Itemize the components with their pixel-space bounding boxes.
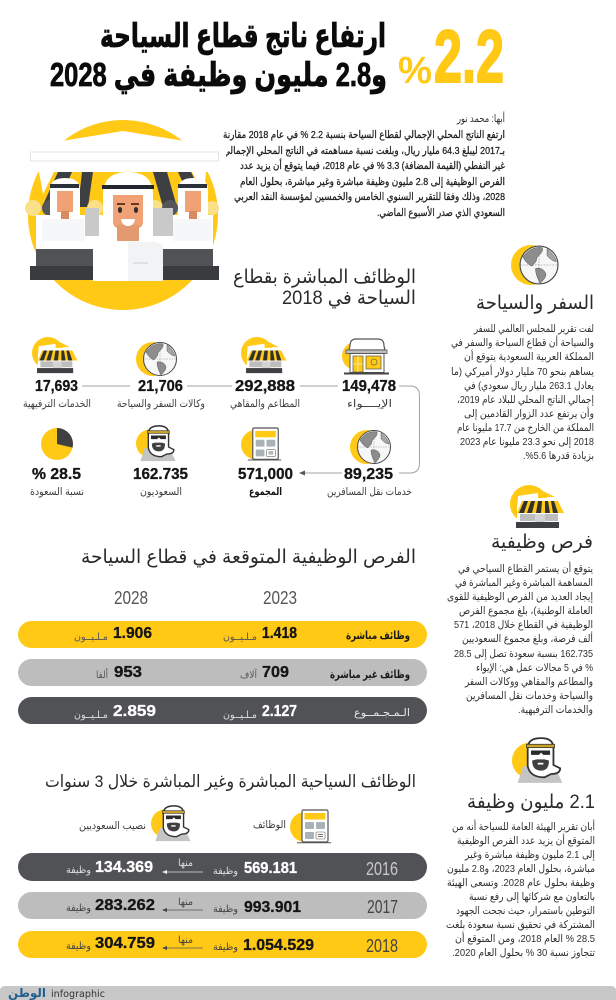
row: 2016: 2016 — [366, 859, 398, 879]
panel: 2.1 million jobs: إلى 2.1 مليون وظيفة مباشرة وغير — [464, 849, 595, 861]
panel: travel and tourism: بزيادة قدرها 5.6%. — [523, 450, 594, 462]
panel: travel and tourism — [451, 245, 594, 462]
heading: expected job opportunities: الفرص الوظيفية المتوقعة في قطاع السياحة — [81, 547, 416, 568]
panel: job opportunities: العاملة الوطنية)، بلغ مجموع الفرص — [459, 605, 593, 617]
footer bar with logo: الوطن — [8, 986, 46, 1000]
stat: passenger transport: خدمات نقل المسافرين — [327, 486, 412, 498]
row: 2016: منها — [178, 858, 193, 869]
row: total jobs — [18, 697, 427, 724]
row: indirect jobs: 709 — [262, 664, 289, 681]
panel: 2.1 million jobs: بالتعاون مع شركائها إلى رفع نسبة — [469, 891, 595, 903]
headline percentage: 2.2 — [434, 15, 504, 98]
row: total jobs: 2.859 — [113, 703, 156, 720]
stat: Saudization rate pie: نسبة السعودة — [30, 486, 84, 498]
row: indirect jobs — [18, 659, 427, 686]
row: direct jobs: وظائف مباشرة — [346, 630, 410, 642]
row: total jobs: مـلـيــون — [74, 710, 108, 721]
panel: job opportunities: % في 5 مجالات عمل هي: الإيواء — [476, 662, 593, 674]
stat: total — [238, 428, 293, 498]
panel: job opportunities: يتوقع أن يستمر القطاع السياحي في — [458, 561, 593, 575]
stat: total: المجموع — [249, 486, 282, 498]
stat: travel agencies: 21,706 — [138, 378, 183, 395]
panel: 2.1 million jobs: وظيفة بحلول عام 2028. وتسعى الهيئة — [447, 877, 595, 889]
legend: jobs: الوظائف — [253, 819, 286, 831]
stat: Saudis: 162.735 — [133, 466, 188, 483]
headline percentage: % — [398, 50, 432, 92]
row: 2016: 134.369 — [95, 859, 153, 876]
title: ارتفاع ناتج قطاع السياحة — [100, 17, 386, 56]
row: 2016: وظيفة — [213, 866, 238, 877]
heading: direct jobs 2018: السياحة في 2018 — [282, 288, 416, 309]
panel: job opportunities: والسياحة وخدمات نقل المسافرين — [466, 690, 593, 702]
stat: restaurants and cafes: المطاعم والمقاهي — [230, 398, 300, 410]
panel: 2.1 million jobs: المشتركة في تحقيق نسبة سعودة بلغت — [446, 919, 595, 931]
panel: travel and tourism: وأن يرتفع عدد الزوار القادمين إلى — [464, 406, 594, 420]
year headers — [114, 588, 297, 608]
row: 2016 — [18, 853, 427, 881]
footer bar with logo: infographic — [51, 989, 105, 1000]
connector lines between stats — [82, 386, 420, 476]
stat: travel agencies: وكالات السفر والسياحة — [117, 398, 205, 410]
panel: travel and tourism: يعادل 263.1 مليار ريال سعودي) في — [464, 380, 594, 392]
row: 2018: منها — [178, 935, 193, 946]
stat: Saudization rate pie: % 28.5 — [32, 466, 81, 483]
row: direct jobs: مـلـيــون — [223, 632, 257, 643]
panel: job opportunities: المساهمة المباشرة وغير المباشرة في — [455, 577, 593, 589]
panel: job opportunities: 162.735 بنسبة سعودة تصل إلى 28.5 — [454, 648, 593, 660]
panel: job opportunities: ألف فرصة، وبلغ مجموع السعوديين — [462, 631, 593, 645]
panel: job opportunities: والخدمات الترفيهية. — [518, 704, 593, 716]
panel: job opportunities: الوظيفية في القطاع خلال 2018، 571 — [454, 619, 593, 631]
panel: 2.1 million jobs: التوطين باستمرار، حيث نجحت الجهود — [456, 905, 595, 917]
row: 2017: 2017 — [367, 897, 398, 917]
row: 2017: 993.901 — [244, 899, 301, 916]
panel: job opportunities: إيجاد العديد من الفرص الوظيفية للقوى — [447, 591, 593, 603]
footer bar with logo — [0, 986, 616, 1000]
intro paragraph: 2028، وذلك وفقا للتقرير السنوي الخامس والخمسين لمؤسسة النقد العربي — [234, 191, 505, 203]
title — [50, 17, 387, 95]
intro paragraph: بـ2017 ليبلغ 64.3 مليار ريال، وبلغت نسبة مساهمته في الناتج المحلي الإجمالي — [223, 145, 505, 157]
stat: restaurants and cafes — [230, 337, 300, 410]
panel: job opportunities: والمطاعم والمقاهي ووكالات السفر — [464, 676, 593, 688]
legend: jobs — [253, 810, 331, 843]
row: indirect jobs: آلاف — [240, 668, 258, 681]
heading: jobs over 3 years: الوظائف السياحية المباشرة وغير المباشرة خلال 3 سنوات — [45, 772, 416, 791]
year headers: 2028 — [114, 588, 148, 608]
intro paragraph: الفرص الوظيفية إلى 2.8 مليون وظيفة مباشرة وغير مباشرة، بحلول العام — [240, 176, 505, 188]
legend: Saudi share — [79, 806, 191, 841]
stat: restaurants and cafes: 292,888 — [235, 378, 295, 395]
row: direct jobs: مـلـيــون — [74, 632, 108, 643]
row: 2016: وظيفة — [66, 865, 91, 876]
panel: job opportunities — [447, 485, 593, 716]
panel: travel and tourism: يساهم بنحو 70 مليار دولار أميركي (ما — [451, 364, 594, 378]
panel: travel and tourism: المملكة العربية السعودية يتوقع أن — [464, 349, 594, 363]
stat: total: 571,000 — [238, 466, 293, 483]
row: 2017: 283.262 — [95, 897, 155, 914]
panel: travel and tourism: 2018 إلى نحو 23.3 مليونا عام 2023 — [460, 436, 594, 448]
panel: travel and tourism: السفر والسياحة — [476, 293, 594, 314]
row: 2018 — [18, 931, 427, 958]
row: 2018: وظيفة — [213, 942, 238, 953]
stat: accommodation — [342, 339, 396, 410]
panel: 2.1 million jobs: 2.1 مليون وظيفة — [467, 792, 595, 813]
panel: 2.1 million jobs: المتوقع أن يزيد عدد الفرص الوظيفية — [457, 833, 595, 847]
panel: travel and tourism: إجمالي الناتج المحلي للبلاد عام 2019، — [457, 394, 594, 406]
row: total jobs: 2.127 — [262, 703, 297, 720]
stat: passenger transport — [327, 430, 412, 498]
panel: 2.1 million jobs: تتجاوز نسبة 30 % بحلول العام 2020. — [452, 947, 595, 959]
panel: 2.1 million jobs: أبان تقرير الهيئة العامة للسياحة أنه من — [452, 819, 595, 833]
panel: 2.1 million jobs: مباشرة، بحلول العام 2023، و2.8 مليون — [447, 863, 595, 875]
row: 2017: منها — [178, 897, 193, 908]
row: total jobs: الـمـجـمــوع — [354, 707, 410, 719]
stat: passenger transport: 89,235 — [344, 466, 393, 483]
row: direct jobs: 1.906 — [113, 625, 152, 642]
intro paragraph — [223, 129, 505, 219]
stat: Saudization rate pie — [30, 428, 84, 498]
stat: entertainment services: 17,693 — [35, 378, 78, 395]
heading: direct jobs 2018: الوظائف المباشرة بقطاع — [233, 267, 416, 288]
legend: Saudi share: نصيب السعوديين — [79, 820, 146, 832]
row: total jobs: مـلـيــون — [223, 710, 257, 721]
row: 2016: 569.181 — [244, 860, 297, 877]
row: 2018: وظيفة — [66, 941, 91, 952]
stat: accommodation: 149,478 — [342, 378, 396, 395]
panel: travel and tourism: المملكة من الخارج من 17.7 مليونا عام — [457, 422, 594, 434]
panel: travel and tourism: والسياحة أن قطاع السياحة والسفر في — [451, 335, 594, 349]
row: 2017 — [18, 892, 427, 919]
stat: Saudis — [133, 426, 188, 498]
stat: entertainment services: الخدمات الترفيهية — [23, 398, 91, 410]
row: 2017: وظيفة — [213, 904, 238, 915]
panel: 2.1 million jobs: 28.5 % العام 2018، ومن المتوقع أن — [455, 931, 595, 945]
intro paragraph: ارتفع الناتج المحلي الإجمالي لقطاع السياحة بنسبة 2.2 % في عام 2018 مقارنة — [223, 129, 505, 141]
heading: direct jobs 2018 — [233, 267, 416, 309]
intro paragraph: السعودي الذي صدر الأسبوع الماضي. — [377, 206, 505, 219]
row: 2017: وظيفة — [66, 903, 91, 914]
row: direct jobs: 1.418 — [262, 625, 297, 642]
stat: accommodation: الإيــــواء — [347, 398, 392, 410]
panel: job opportunities: فرص وظيفية — [491, 532, 593, 553]
row: direct jobs — [18, 621, 427, 648]
stat: Saudis: السعوديون — [140, 486, 182, 498]
stat: entertainment services — [23, 337, 91, 410]
row: 2018: 1.054.529 — [243, 937, 314, 954]
row: 2018: 2018 — [366, 936, 398, 956]
intro paragraph: غير النفطي (القيمة المضافة) 3.3 % في عام 2018، فيما يتوقع أن يزيد عدد — [240, 158, 505, 172]
panel: 2.1 million jobs — [446, 738, 595, 959]
title: و2.8 مليون وظيفة في 2028 — [50, 56, 387, 95]
byline: أبها: محمد نور — [456, 111, 505, 125]
row: indirect jobs: 953 — [114, 664, 142, 681]
year headers: 2023 — [263, 588, 297, 608]
headline percentage — [398, 15, 504, 98]
stat: travel agencies — [117, 342, 205, 410]
hero illustration: three Saudi staff at a counter — [20, 120, 226, 310]
row: indirect jobs: ألفا — [96, 668, 108, 681]
row: 2018: 304.759 — [95, 935, 155, 952]
row: indirect jobs: وظائف غير مباشرة — [330, 669, 410, 681]
